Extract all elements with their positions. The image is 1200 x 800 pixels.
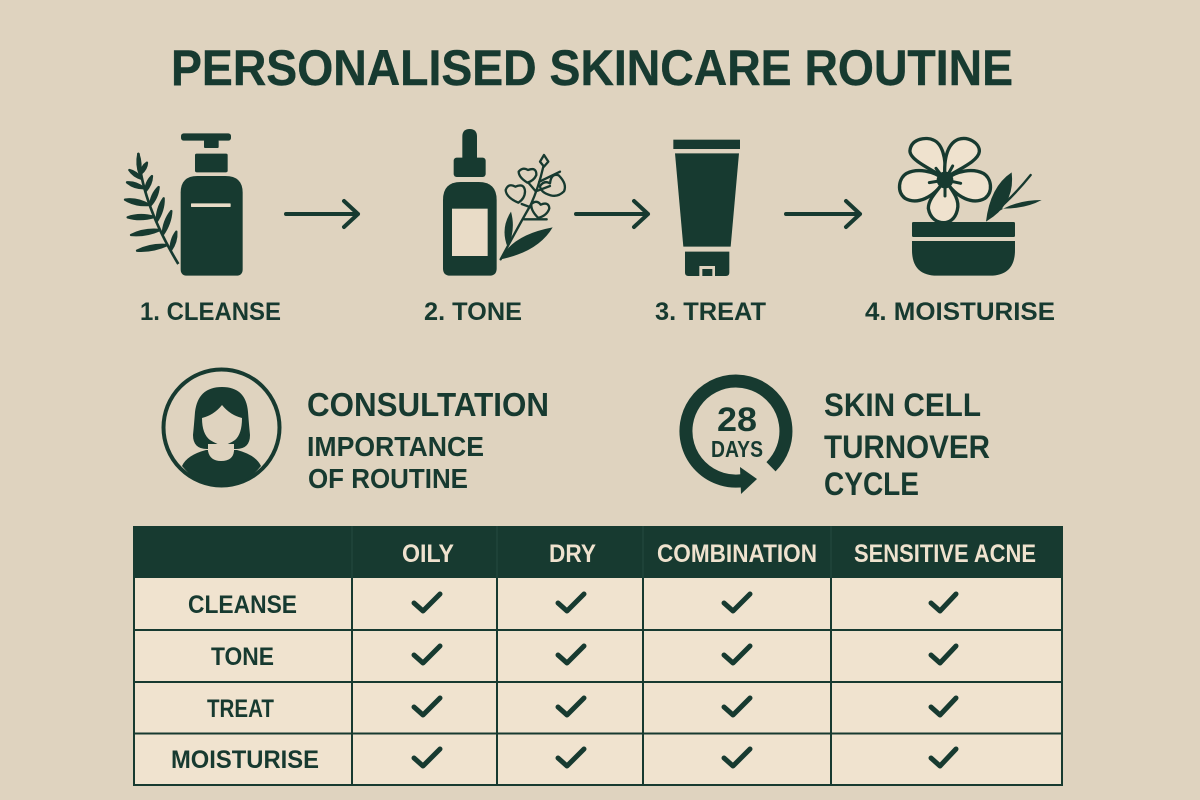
icon: pump bottle with leaf sprig [125,133,243,276]
table: routine by skin type [133,526,1063,785]
step 1: cleanse [125,133,281,326]
heading line 1: SKIN CELL [824,387,981,423]
label: 3. TREAT [655,298,766,326]
arrow 3 [786,201,860,227]
icon: person in circle [164,370,280,486]
row labels: TREAT [207,695,274,723]
step 3: treat [655,140,766,326]
label: 4. MOISTURISE [865,298,1055,326]
table header: COMBINATION [657,540,817,568]
table header: DRY [549,540,596,568]
text: OF ROUTINE [308,463,468,494]
text: IMPORTANCE [307,431,484,462]
row labels [171,591,319,774]
number: 28 [717,401,757,439]
label: 2. TONE [424,298,522,326]
heading line 3: CYCLE [824,466,919,502]
row labels: CLEANSE [188,591,297,619]
consultation block [164,370,549,494]
arrow 1 [286,201,358,227]
icon: flower and bowl [900,138,1042,276]
label: 1. CLEANSE [140,298,281,326]
check marks [414,594,956,766]
table header [133,526,1063,578]
skin cell turnover block [686,381,990,502]
icon: cream tube [673,140,740,276]
heading line 2: TURNOVER [824,429,990,465]
arrow 2 [576,201,648,227]
row labels: MOISTURISE [171,746,319,774]
title: PERSONALISED SKINCARE ROUTINE [171,40,1013,96]
icon: 28 days cycle [686,381,786,494]
unit: DAYS [711,436,763,462]
heading: CONSULTATION [307,386,549,423]
step 4: moisturise [865,138,1055,326]
table header: SENSITIVE ACNE [854,540,1036,568]
icon: dropper bottle with flowering branch [443,129,565,276]
table header: OILY [402,540,454,568]
step 2: tone [424,129,565,326]
row labels: TONE [211,643,274,671]
